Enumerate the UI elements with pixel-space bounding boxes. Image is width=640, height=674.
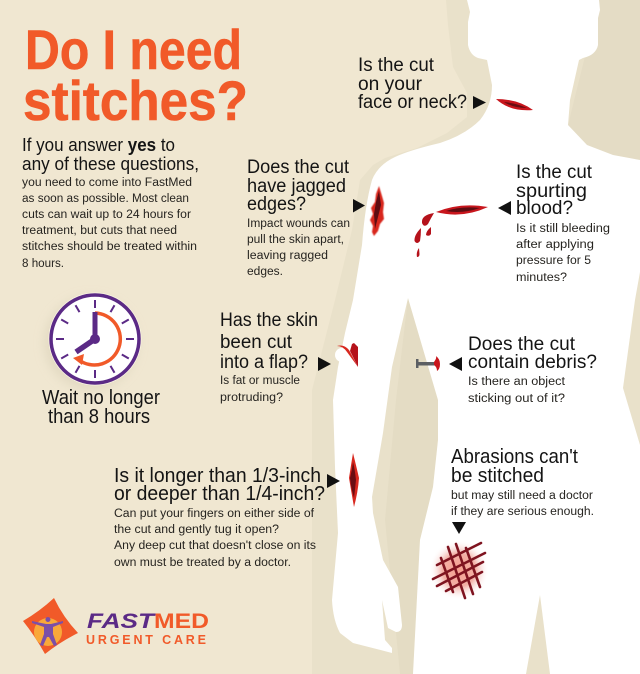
intro text	[22, 135, 199, 270]
logo mark	[23, 598, 78, 654]
logo: FastMed Urgent Care: FAST	[87, 610, 157, 633]
question: spurting blood: after applying	[516, 239, 594, 251]
question: length and depth	[114, 465, 325, 569]
wound: long cut	[349, 453, 359, 507]
question: jagged edges: edges?	[247, 194, 306, 215]
question: skin flap	[220, 310, 318, 404]
question: jagged edges: pull the skin apart,	[247, 234, 344, 246]
title: Do I need	[25, 18, 242, 81]
arrow: jagged	[353, 199, 365, 212]
white body	[332, 0, 640, 674]
question: length and depth: Can put your fingers on either side of	[114, 508, 315, 520]
clock caption: Wait no longer	[42, 387, 160, 409]
logo: FastMed Urgent Care	[23, 598, 209, 654]
question: abrasions: if they are serious enough.	[451, 506, 594, 518]
question: debris: sticking out of it?	[468, 393, 565, 405]
question: length and depth: the cut and gently tug it open?	[114, 524, 279, 536]
question: length and depth: or deeper than 1/4-inch?	[114, 483, 325, 505]
arrow: flap	[318, 357, 331, 371]
question: debris: Is there an object	[468, 376, 566, 388]
wound: jagged cut	[370, 186, 384, 236]
question: debris: Does the cut	[468, 334, 576, 355]
wound: flap	[337, 343, 358, 367]
question: jagged edges	[247, 157, 350, 278]
question: jagged edges: Impact wounds can	[247, 218, 350, 230]
question: spurting blood: pressure for 5	[516, 255, 591, 267]
flap skin bulge	[335, 348, 349, 362]
intro text: any of these questions,	[22, 154, 199, 174]
intro text: you need to come into FastMed	[22, 177, 192, 189]
question: length and depth: Is it longer than 1/3-inch	[114, 465, 321, 487]
question: skin flap: Is fat or muscle	[220, 375, 300, 387]
intro text: If you answer yes to	[22, 135, 175, 155]
question: abrasions: be stitched	[451, 465, 544, 487]
question: spurting blood: blood?	[516, 198, 573, 219]
intro text: treatment, but cuts that need	[22, 225, 177, 237]
wound: abrasion	[429, 540, 489, 600]
intro text: 8 hours.	[22, 258, 64, 270]
wound: debris nail	[416, 356, 440, 371]
question: face or neck	[358, 55, 467, 113]
question: skin flap: been cut	[220, 332, 293, 353]
wound: neck cut	[496, 99, 533, 110]
question: spurting blood: Is the cut	[516, 162, 593, 183]
question: skin flap: protruding?	[220, 392, 283, 404]
question: jagged edges: leaving ragged	[247, 250, 328, 262]
question: abrasions: but may still need a doctor	[451, 490, 593, 502]
intro text: stitches should be treated within	[22, 241, 197, 253]
question: jagged edges: have jagged	[247, 176, 346, 197]
intro text: as soon as possible. Most clean	[22, 193, 189, 205]
logo: FastMed Urgent Care: MED	[154, 610, 209, 633]
intro text: cuts can wait up to 24 hours for	[22, 209, 191, 221]
arrow: debris	[449, 357, 462, 371]
body silhouette with shadow	[312, 0, 640, 674]
question: debris	[468, 334, 597, 405]
question: length and depth: own must be treated by a doctor.	[114, 557, 291, 569]
arrow: spurting	[498, 201, 511, 215]
clock	[44, 292, 142, 390]
question: face or neck: on your	[358, 74, 423, 95]
arrow: neck	[473, 96, 486, 109]
question: skin flap: into a flap?	[220, 352, 308, 373]
question: abrasions	[451, 446, 594, 518]
arrow: abrasions	[452, 522, 466, 534]
question: jagged edges: edges.	[247, 266, 283, 278]
wound: spurting cut with drops	[414, 205, 488, 257]
question: face or neck: Is the cut	[358, 55, 435, 76]
question: jagged edges: Does the cut	[247, 157, 350, 178]
question: debris: contain debris?	[468, 352, 597, 373]
question: spurting blood: spurting	[516, 181, 587, 202]
clock caption: than 8 hours	[48, 406, 150, 428]
question: length and depth: Any deep cut that doesn't close on its	[114, 540, 316, 552]
arrow: length	[327, 474, 340, 488]
question: face or neck: face or neck?	[358, 92, 467, 113]
title: stitches?	[23, 69, 248, 132]
question: spurting blood: minutes?	[516, 272, 567, 284]
question: skin flap: Has the skin	[220, 310, 318, 331]
title	[23, 18, 248, 132]
question: abrasions: Abrasions can't	[451, 446, 578, 468]
question: spurting blood	[516, 162, 610, 284]
clock caption	[42, 387, 160, 428]
question: spurting blood: Is it still bleeding	[516, 223, 610, 235]
logo: FastMed Urgent Care: URGENT CARE	[86, 633, 206, 647]
